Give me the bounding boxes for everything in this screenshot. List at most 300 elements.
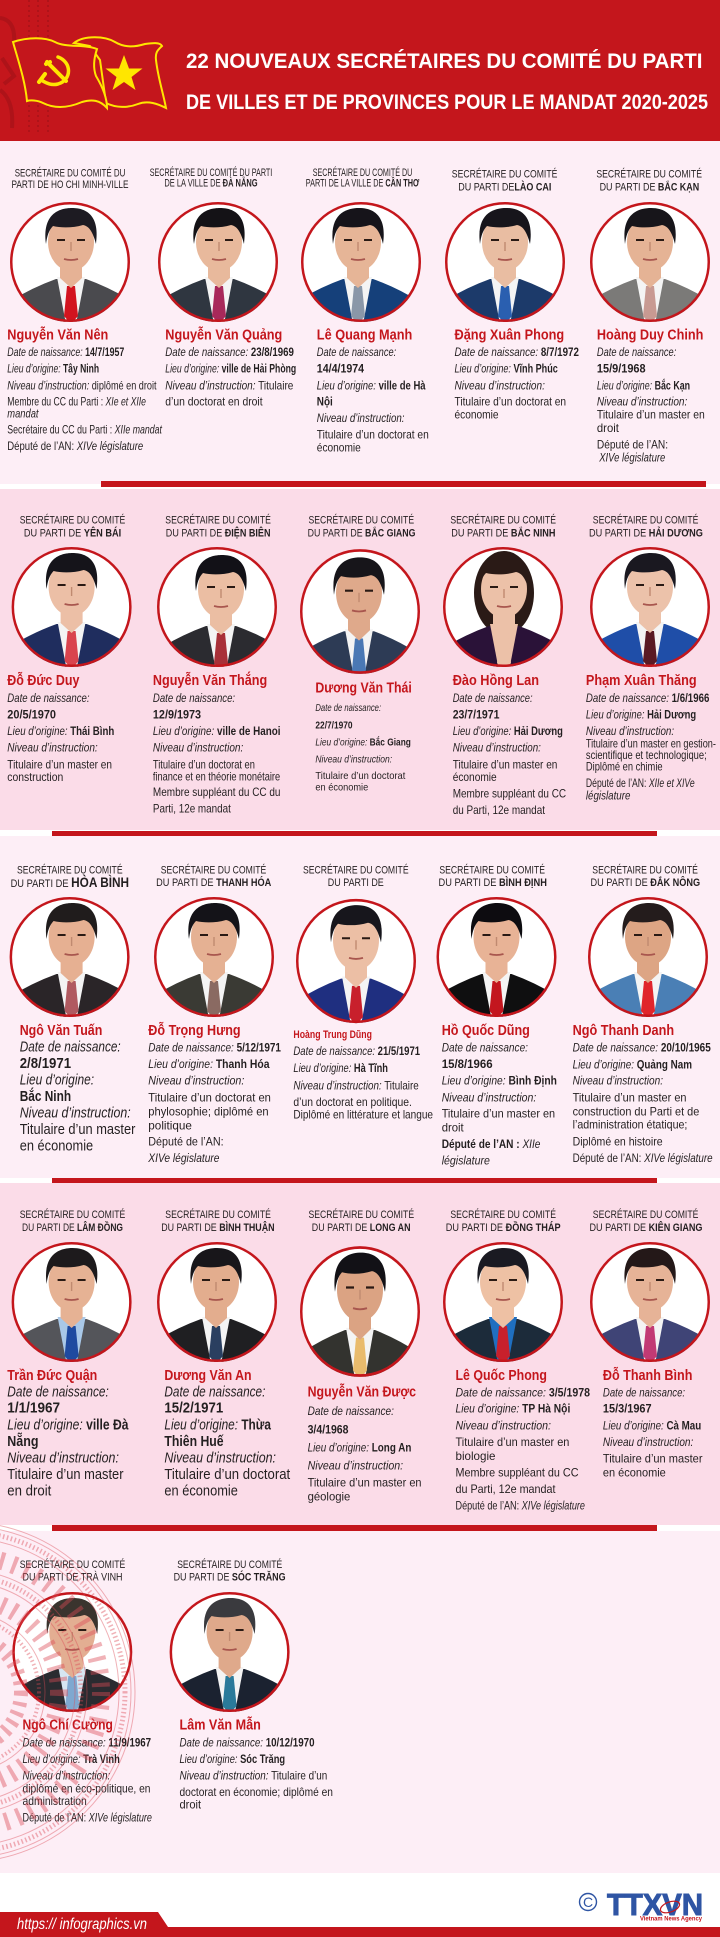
details: Niveau d’instruction: (148, 1074, 244, 1088)
details: Bắc Ninh (20, 1087, 71, 1105)
name: Lê Quang Mạnh (317, 328, 412, 344)
details: droit (180, 1798, 202, 1812)
details: Titulaire d’un doctorat (315, 770, 405, 782)
heading: SECRÉTAIRE DU COMITÉ (439, 863, 545, 876)
details: administration (22, 1794, 87, 1808)
details: en économie (603, 1465, 666, 1479)
details: Date de naissance: 21/5/1971 (293, 1044, 420, 1058)
details: Niveau d’instruction: (317, 411, 404, 425)
heading (156, 863, 271, 889)
details: Titulaire d’un doctorat (164, 1467, 290, 1483)
heading: SECRÉTAIRE DU COMITÉ (20, 514, 125, 527)
details: XIVe législature (147, 1151, 220, 1165)
heading: SECRÉTAIRE DU COMITÉ (17, 863, 123, 876)
details: Lieu d’origine: Sóc Trăng (180, 1752, 285, 1766)
heading: SECRÉTAIRE DU COMITÉ (177, 1558, 282, 1571)
name: Đỗ Trọng Hưng (148, 1022, 241, 1039)
details: Lieu d’origine: Cà Mau (603, 1418, 701, 1432)
details: Niveau d’instruction: (442, 1090, 536, 1104)
heading: DU PARTI DE THANH HÓA (156, 876, 271, 889)
details: Parti, 12e mandat (153, 802, 231, 816)
details (573, 1041, 713, 1165)
details: Date de naissance: (315, 702, 381, 714)
secretary: Ngô Văn Tuấn (10, 863, 136, 1154)
heading: SECRÉTAIRE DU COMITÉ (308, 1208, 414, 1221)
details: Titulaire d’un master en (597, 408, 705, 422)
details: Date de naissance: (7, 1384, 109, 1400)
panel: row 3 (0, 836, 720, 1183)
details: Niveau d’instruction: (573, 1074, 663, 1088)
portrait (441, 1242, 565, 1364)
details: construction du Parti et de (573, 1104, 700, 1118)
details: Titulaire d’un master en (573, 1090, 686, 1104)
portrait (586, 897, 710, 1019)
details: Date de naissance: (453, 691, 533, 705)
details: Titulaire d’un master (20, 1122, 136, 1138)
portrait (294, 899, 418, 1025)
details: Niveau d’instruction: (7, 1450, 119, 1466)
details: Niveau d’instruction: (603, 1435, 693, 1449)
heading: SECRÉTAIRE DU COMITÉ DU (15, 167, 125, 180)
details: Député de l’AN: XIVe législature (456, 1499, 585, 1513)
details: Membre suppléant du CC (456, 1465, 579, 1479)
details: Date de naissance: 11/9/1967 (22, 1735, 151, 1749)
details: Niveau d’instruction: (586, 724, 674, 738)
details: Date de naissance: (603, 1385, 685, 1399)
secretary: Dương Văn An (154, 1208, 290, 1499)
details: Date de naissance: 14/7/1957 (7, 345, 125, 359)
heading: PARTI DE LA VILLE DE CẦN THƠ (306, 176, 420, 190)
secretary: Lê Quang Mạnh (296, 166, 429, 454)
heading: DU PARTI DE LÂM ĐỒNG (22, 1221, 123, 1234)
name: Hoàng Duy Chinh (597, 328, 703, 344)
secretary: Nguyễn Văn Quảng (150, 166, 296, 409)
name: Ngô Văn Tuấn (20, 1023, 102, 1039)
heading (12, 167, 128, 191)
secretary: Lâm Văn Mẫn (168, 1558, 333, 1812)
name: Dương Văn An (164, 1368, 252, 1384)
details: Date de naissance: 23/8/1969 (165, 345, 294, 359)
details: Niveau d’instruction: Titulaire (165, 378, 294, 392)
details: Titulaire d’un doctorat en (148, 1090, 271, 1104)
portrait (10, 1592, 134, 1714)
footer (0, 1887, 720, 1937)
secretary: Đỗ Thanh Bình (588, 1208, 712, 1479)
details: l’administration étatique; (573, 1118, 687, 1132)
heading: SECRÉTAIRE DU COMITÉ (20, 1208, 125, 1221)
details: doctorat en économie; diplômé en (180, 1785, 333, 1799)
heading (446, 1208, 561, 1234)
details: Membre du CC du Parti : XIe et XIIe (7, 395, 146, 409)
portrait (157, 202, 281, 324)
portrait (297, 549, 421, 678)
icon: copyright (580, 1894, 596, 1910)
heading: DU PARTI DE LONG AN (312, 1222, 411, 1234)
name: Đào Hồng Lan (453, 673, 539, 689)
heading (590, 1208, 702, 1234)
secretary: Nguyễn Văn Thắng (153, 514, 283, 816)
details: droit (597, 421, 620, 435)
details: Titulaire d’un doctorat en (153, 757, 255, 771)
portrait (10, 1242, 134, 1364)
details: économie (453, 770, 497, 784)
heading: DU PARTI DE KIÊN GIANG (590, 1221, 702, 1234)
details (454, 345, 579, 421)
details: géologie (308, 1489, 351, 1503)
secretary: Đỗ Trọng Hưng (147, 863, 281, 1165)
panel: row 4 (0, 1183, 720, 1525)
details: diplômé en éco-politique, en (22, 1781, 150, 1795)
details: Lieu d’origine: Hải Dương (453, 724, 563, 738)
details: 15/3/1967 (603, 1402, 652, 1416)
details: Membre suppléant du CC (453, 786, 566, 800)
details: 20/5/1970 (7, 708, 56, 722)
title (186, 48, 708, 114)
details: Niveau d’instruction: diplômé en droit (7, 378, 157, 392)
details: législature (442, 1154, 490, 1168)
heading (165, 514, 271, 539)
details: Diplômé en littérature et langue (293, 1108, 433, 1122)
secretary: Phạm Xuân Thăng (586, 514, 716, 803)
details (7, 1384, 129, 1499)
portrait (10, 897, 134, 1019)
portrait (296, 202, 421, 324)
details (180, 1735, 333, 1812)
heading: DU PARTI DE BÌNH THUẬN (161, 1221, 275, 1234)
heading: DU PARTI DE BÌNH ĐỊNH (438, 876, 547, 889)
heading: DU PARTI DE HÒA BÌNH (11, 873, 129, 890)
heading: DU PARTI DE ĐẮK NÔNG (590, 876, 700, 889)
name: Dương Văn Thái (315, 681, 412, 697)
details (293, 1044, 433, 1122)
portrait (154, 1242, 278, 1364)
details: Lieu d’origine: ville Đà (7, 1417, 129, 1433)
details: en économie (315, 782, 368, 794)
heading: PARTI DE HO CHI MINH-VILLE (12, 179, 128, 191)
details: Titulaire d’un master en (453, 757, 557, 771)
heading: SECRÉTAIRE DU COMITÉ (165, 514, 271, 527)
details (165, 345, 296, 409)
details: construction (7, 770, 63, 784)
heading (11, 863, 129, 890)
details: Niveau d’instruction: (453, 741, 541, 755)
heading (452, 167, 557, 193)
decorative drum pattern (0, 0, 48, 132)
name: Nguyễn Văn Quảng (165, 327, 282, 344)
secretary: Trần Đức Quận (7, 1208, 134, 1499)
details (315, 702, 411, 794)
details (7, 691, 114, 784)
details: finance et en théorie monétaire (153, 769, 280, 783)
details: Niveau d’instruction: (153, 741, 243, 755)
details: Niveau d’instruction: (164, 1450, 276, 1466)
portrait (434, 897, 558, 1019)
details: du Parti, 12e mandat (453, 803, 546, 817)
details: Date de naissance: (442, 1041, 528, 1055)
heading: DE LA VILLE DE ĐÀ NẴNG (164, 176, 258, 190)
details (22, 1735, 152, 1825)
details: Lieu d’origine: Hải Dương (586, 708, 696, 722)
details: Niveau d’instruction: (597, 395, 687, 409)
details: Niveau d’instruction: (315, 753, 392, 765)
details: économie (454, 407, 499, 421)
secretary: Nguyễn Văn Được (298, 1208, 422, 1503)
details: Date de naissance: 8/7/1972 (454, 345, 579, 359)
portrait (588, 1242, 712, 1364)
details: Titulaire d’un doctorat en (454, 395, 566, 409)
panel: row 1 (0, 141, 720, 487)
details: Date de naissance: (153, 691, 235, 705)
portrait (588, 547, 712, 669)
details: du Parti, 12e mandat (456, 1482, 556, 1496)
details: Lieu d’origine: ville de Hanoi (153, 724, 280, 738)
icon: hammer and sickle (39, 57, 68, 85)
heading (590, 863, 700, 889)
portrait (298, 1246, 422, 1379)
heading: DU PARTI DE BẮC KẠN (600, 180, 699, 193)
details: législature (586, 789, 631, 803)
details: XIVe législature (598, 451, 666, 465)
secretary: Hoàng Duy Chinh (588, 167, 712, 465)
details (153, 691, 280, 816)
details: Date de naissance: (164, 1384, 265, 1400)
portrait (168, 1592, 292, 1714)
name: Ngô Chí Cường (22, 1717, 113, 1733)
secretary: Ngô Chí Cường (10, 1558, 152, 1825)
details: phylosophie; diplômé en (148, 1104, 269, 1118)
name: Nguyễn Văn Nên (7, 327, 108, 344)
panel: row 2 (0, 489, 720, 836)
heading: SECRÉTAIRE DU COMITÉ DU (313, 166, 412, 179)
secretary: Đỗ Đức Duy (7, 514, 134, 784)
secretary: Đào Hồng Lan (442, 514, 566, 817)
details: biologie (456, 1449, 496, 1463)
details: d’un doctorat en droit (165, 395, 263, 409)
details: 15/8/1966 (442, 1057, 493, 1071)
details: en économie (20, 1138, 93, 1154)
heading: SECRÉTAIRE DU COMITÉ (450, 514, 556, 527)
panel: row 5 (0, 1522, 720, 1873)
details: Député de l’AN: (597, 438, 668, 452)
details: 1/1/1967 (7, 1401, 60, 1417)
details: Diplômé en histoire (573, 1134, 663, 1148)
portrait (442, 547, 566, 671)
name: Đặng Xuân Phong (454, 328, 564, 344)
heading (450, 514, 556, 539)
details: Date de naissance: 3/5/1978 (456, 1385, 590, 1399)
details: Titulaire d’un doctorat en (317, 428, 429, 442)
details: 3/4/1968 (308, 1422, 349, 1436)
heading: SECRÉTAIRE DU COMITÉ (308, 514, 414, 527)
heading (589, 514, 703, 539)
details (308, 1404, 422, 1503)
name: Nguyễn Văn Thắng (153, 671, 267, 689)
name: Hồ Quốc Dũng (442, 1023, 530, 1039)
heading: SECRÉTAIRE DU COMITÉ (20, 1558, 125, 1571)
portrait (9, 202, 133, 324)
details (317, 345, 429, 454)
secretary: Lê Quốc Phong (441, 1208, 590, 1513)
details: Date de naissance: 1/6/1966 (586, 691, 710, 705)
name: Lâm Văn Mẫn (180, 1716, 261, 1733)
name: Đỗ Thanh Bình (603, 1367, 692, 1384)
heading: DU PARTI DE ĐIỆN BIÊN (166, 526, 271, 539)
details (453, 691, 566, 817)
details: Niveau d’instruction: (454, 378, 545, 392)
details: Date de naissance: 10/12/1970 (180, 1735, 315, 1749)
icon: star (106, 55, 142, 90)
details: Titulaire d’un master en (456, 1435, 569, 1449)
details: Lieu d’origine: Quảng Nam (573, 1057, 692, 1071)
icon: copyright: C (583, 1894, 593, 1910)
decorative drum pattern (0, 1522, 135, 1862)
portrait (10, 547, 134, 669)
heading (306, 166, 420, 190)
details: Lieu d’origine: Thừa (164, 1417, 272, 1433)
details: Date de naissance: (597, 345, 676, 359)
details: Date de naissance: (7, 691, 89, 705)
details: d’un doctorat en politique. (293, 1095, 412, 1109)
details: mandat (7, 406, 39, 420)
logo: TTXVN: Vietnam News Agency (640, 1916, 703, 1922)
details: Nội (317, 395, 333, 409)
details: Niveau d’instruction: (20, 1105, 131, 1121)
details: Titulaire d’un master en (442, 1107, 555, 1121)
url tab: https:// infographics.vn (17, 1916, 147, 1933)
details: Lieu d’origine: Thái Bình (7, 724, 114, 738)
details: Lieu d’origine: TP Hà Nội (456, 1402, 570, 1416)
heading: SECRÉTAIRE DU COMITÉ (450, 1208, 556, 1221)
heading (303, 863, 409, 889)
heading: DU PARTI DE TRÀ VINH (22, 1571, 123, 1584)
heading (308, 514, 416, 539)
name: Phạm Xuân Thăng (586, 673, 697, 689)
icon: party and national flags (13, 37, 166, 108)
details: Lieu d’origine: Vĩnh Phúc (454, 362, 558, 376)
secretary: Dương Văn Thái (297, 514, 421, 794)
heading (150, 166, 272, 190)
secretary: Đặng Xuân Phong (443, 167, 579, 421)
heading: SECRÉTAIRE DU COMITÉ DU PARTI (150, 166, 272, 179)
details: en économie (164, 1483, 238, 1499)
details: Date de naissance: 5/12/1971 (148, 1041, 281, 1055)
heading: SECRÉTAIRE DU COMITÉ (161, 863, 266, 876)
portrait (443, 202, 567, 324)
details (164, 1384, 290, 1499)
details: Lieu d’origine: ville de Hà (317, 378, 426, 392)
heading: SECRÉTAIRE DU COMITÉ (452, 167, 557, 180)
details: Lieu d’origine: Bình Định (442, 1074, 557, 1088)
details: Député de l’AN: XIVe législature (22, 1811, 152, 1825)
portrait (152, 897, 276, 1019)
details: Lieu d’origine: Bắc Giang (315, 735, 411, 748)
portrait (157, 547, 283, 671)
details: Date de naissance: (308, 1404, 394, 1418)
details: Thiên Huế (164, 1434, 224, 1450)
name: Hoàng Trung Dũng (293, 1029, 372, 1041)
heading (20, 514, 125, 539)
details: Secrétaire du CC du Parti : XIIe mandat (7, 423, 162, 437)
details: Lieu d’origine: (20, 1072, 94, 1088)
details: Niveau d’instruction: (456, 1418, 551, 1432)
heading: DU PARTI DE ĐỒNG THÁP (446, 1221, 561, 1234)
details: 14/4/1974 (317, 362, 364, 376)
heading (161, 1208, 275, 1234)
name: Đỗ Đức Duy (7, 672, 79, 689)
details: Lieu d’origine: Hà Tĩnh (293, 1061, 388, 1075)
details: Niveau d’instruction: Titulaire (293, 1078, 419, 1092)
details (597, 345, 705, 465)
secretary: Ngô Thanh Danh (573, 863, 713, 1165)
details: Date de naissance: (20, 1040, 121, 1056)
details: Député de l’AN: XIIe et XIVe (586, 776, 695, 790)
heading: DU PARTI DE SÓC TRĂNG (174, 1571, 286, 1584)
details: Député de l’AN : XIIe (442, 1137, 541, 1151)
details: Lieu d’origine: Bắc Kạn (597, 377, 690, 392)
heading (308, 1208, 414, 1234)
header banner (0, 0, 720, 141)
details: 23/7/1971 (453, 708, 500, 722)
heading (20, 1208, 125, 1234)
details: Niveau d’instruction: (7, 741, 98, 755)
logo: TTXVN: TTXVN (607, 1887, 703, 1922)
details: Lieu d’origine: Thanh Hóa (148, 1057, 270, 1071)
details: Lieu d’origine: Long An (308, 1441, 411, 1455)
details: Lieu d’origine: Trà Vinh (22, 1752, 120, 1766)
details: en droit (7, 1483, 51, 1499)
secretary: Nguyễn Văn Nên (7, 167, 162, 453)
details: Titulaire d’un master en (308, 1475, 422, 1489)
heading (20, 1558, 125, 1584)
details: droit (442, 1121, 464, 1135)
details: Titulaire d’un master en (7, 757, 112, 771)
details: Niveau d’instruction: (22, 1768, 110, 1782)
heading (438, 863, 547, 889)
details: Nẵng (7, 1432, 39, 1450)
details: Date de naissance: 20/10/1965 (573, 1041, 711, 1055)
details: Membre suppléant du CC du (153, 785, 280, 799)
url tab (0, 1912, 720, 1937)
details: Lieu d’origine: Tây Ninh (7, 362, 99, 376)
heading (596, 167, 702, 193)
details (20, 1040, 136, 1154)
details: 15/2/1971 (164, 1401, 223, 1417)
heading: DU PARTI DELÀO CAI (458, 180, 551, 193)
details: Diplômé en chimie (586, 760, 663, 774)
details: Député de l’AN: XIVe législature (7, 439, 143, 453)
title: 22 NOUVEAUX SECRÉTAIRES DU COMITÉ DU PARTI (186, 48, 702, 73)
heading: DU PARTI DE HẢI DƯƠNG (589, 526, 703, 539)
details: Niveau d’instruction: Titulaire d’un (180, 1768, 327, 1782)
name: Nguyễn Văn Được (308, 1384, 416, 1401)
heading: SECRÉTAIRE DU COMITÉ (165, 1208, 271, 1221)
secretary: Hoàng Trung Dũng (293, 863, 433, 1122)
details: 15/9/1968 (597, 362, 646, 376)
portrait (588, 202, 712, 324)
details: Niveau d’instruction: (308, 1459, 403, 1473)
details: Député de l’AN: (148, 1135, 224, 1149)
details (603, 1385, 703, 1479)
details (442, 1041, 557, 1168)
heading: DU PARTI DE BẮC NINH (451, 526, 556, 539)
details: 12/9/1973 (153, 708, 201, 722)
details (7, 345, 162, 453)
details (586, 691, 716, 803)
heading: SECRÉTAIRE DU COMITÉ (303, 863, 409, 876)
heading: DU PARTI DE YÊN BÁI (24, 526, 121, 539)
details: Lieu d’origine: ville de Hải Phòng (165, 362, 296, 376)
details: 2/8/1971 (20, 1056, 71, 1072)
